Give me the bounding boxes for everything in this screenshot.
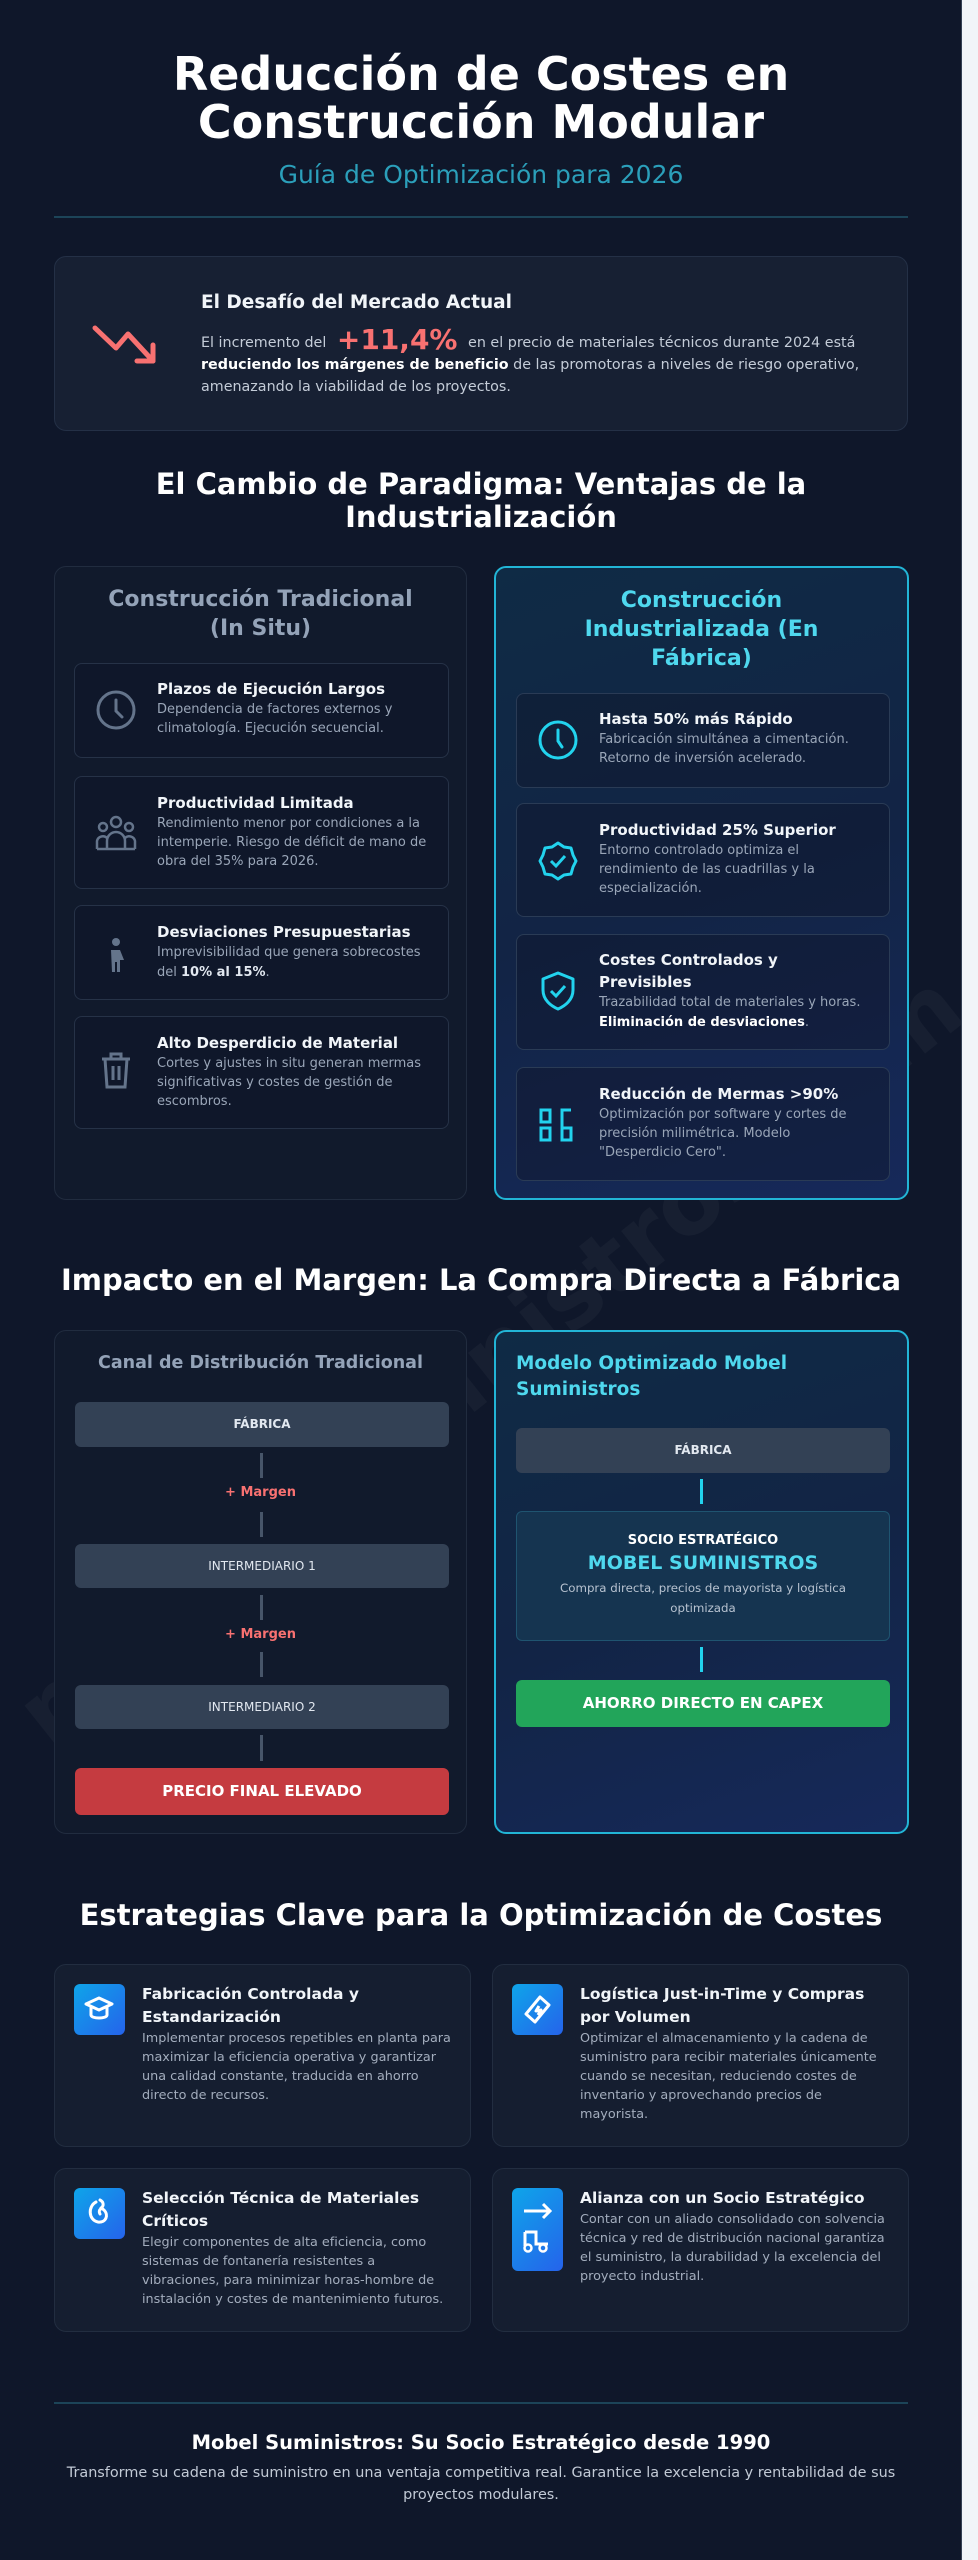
flow: precio final: PRECIO FINAL ELEVADO xyxy=(162,1782,362,1800)
panel title: (In Situ) xyxy=(210,616,311,641)
flow: socio estrategico: SOCIO ESTRATÉGICO xyxy=(628,1533,778,1548)
panel title: Construcción xyxy=(621,588,782,613)
icon: arrow truck xyxy=(512,2188,563,2271)
footer title: Mobel Suministros: Su Socio Estratégico desde 1990 xyxy=(192,2431,770,2454)
item: productividad superior: Entorno controlado optimiza el rendimiento de las cuadrillas y la especialización. xyxy=(599,843,815,896)
panel title: Fábrica) xyxy=(651,646,752,671)
item: productividad: Productividad Limitada xyxy=(157,794,354,812)
item: desperdicio xyxy=(74,1016,449,1129)
item: costes controlados xyxy=(516,934,890,1050)
card: logistica: Logística Just-in-Time y Compras por Volumen xyxy=(580,1985,864,2026)
flow: socio estrategico: MOBEL SUMINISTROS xyxy=(588,1552,818,1574)
card: alianza: Alianza con un Socio Estratégico xyxy=(580,2189,865,2207)
item: desviaciones xyxy=(74,905,449,1000)
icon: leaf xyxy=(74,2188,125,2239)
item: mermas: Optimización por software y cortes de precisión milimétrica. Modelo "Desperdicio Cero". xyxy=(599,1107,847,1160)
heading: impact: Impacto en el Margen: La Compra Directa a Fábrica xyxy=(61,1263,901,1297)
item: costes controlados: Costes Controlados y Previsibles xyxy=(599,951,778,991)
card: alianza: Contar con un aliado consolidado con solvencia técnica y red de distribución nacional garantiza el suministro, la durabilidad y la excelencia del proyecto industrial. xyxy=(580,2212,885,2284)
flow: intermediario 1: INTERMEDIARIO 1 xyxy=(208,1559,316,1573)
card: logistica: Optimizar el almacenamiento y la cadena de suministro para recibir materiales únicamente cuando se necesitan, reduciendo costes de inventario y aprovechando precios de mayorista. xyxy=(580,2031,877,2122)
card: materiales: Selección Técnica de Materiales Críticos xyxy=(142,2189,419,2230)
flow: intermediario 2: INTERMEDIARIO 2 xyxy=(208,1700,316,1714)
item: rapido: Fabricación simultánea a cimentación. Retorno de inversión acelerado. xyxy=(599,732,849,766)
title: Reducción de Costes en xyxy=(173,47,789,101)
title: Construcción Modular xyxy=(198,95,764,149)
panel title: Construcción Tradicional xyxy=(108,587,413,612)
item: rapido: Hasta 50% más Rápido xyxy=(599,710,793,728)
card: logistica xyxy=(492,1964,909,2147)
channel title: Canal de Distribución Tradicional xyxy=(98,1353,423,1373)
heading: paradigm: El Cambio de Paradigma: Ventajas de la xyxy=(156,467,806,501)
item: costes controlados: Trazabilidad total de materiales y horas. Eliminación de desviaciones. xyxy=(599,995,860,1030)
flow: ahorro: AHORRO DIRECTO EN CAPEX xyxy=(583,1694,823,1712)
flow: fabrica: FÁBRICA xyxy=(233,1417,291,1431)
panel: challenge xyxy=(54,256,908,431)
heading: strategies: Estrategias Clave para la Optimización de Costes xyxy=(80,1898,882,1932)
item: desperdicio: Alto Desperdicio de Material xyxy=(157,1034,398,1052)
label: margen 1: + Margen xyxy=(225,1485,296,1500)
heading: paradigm: Industrialización xyxy=(345,500,617,534)
item: plazos: Plazos de Ejecución Largos xyxy=(157,680,385,698)
card: materiales: Elegir componentes de alta eficiencia, como sistemas de fontanería resistentes a vibraciones, para minimizar horas-hombre de instalación y costes de mantenimiento futuros. xyxy=(142,2235,443,2307)
icon: trending down xyxy=(92,326,156,364)
card: fabricacion: Fabricación Controlada y Estandarización xyxy=(142,1985,359,2026)
flow: fabrica: FÁBRICA xyxy=(674,1443,732,1457)
item: desviaciones: Desviaciones Presupuestarias xyxy=(157,923,411,941)
flow: intermediario 1 xyxy=(75,1544,449,1588)
flow: socio estrategico: Compra directa, precios de mayorista y logística optimizada xyxy=(560,1581,846,1615)
panel title xyxy=(585,588,818,671)
panel: traditional channel xyxy=(54,1330,467,1834)
panel: optimized model xyxy=(494,1330,909,1834)
panel title: Industrializada (En xyxy=(585,617,818,642)
flow: precio final xyxy=(75,1768,449,1815)
item: productividad: Rendimiento menor por condiciones a la intemperie. Riesgo de déficit de mano de obra del 35% para 2026. xyxy=(157,816,426,869)
card: alianza xyxy=(492,2168,909,2332)
card: fabricacion: Implementar procesos repetibles en planta para maximizar la eficiencia operativa y garantizar una calidad constante, traducida en ahorro directo de recursos. xyxy=(142,2031,451,2103)
flow: ahorro xyxy=(516,1680,890,1727)
item: productividad superior: Productividad 25% Superior xyxy=(599,821,836,839)
panel: traditional xyxy=(54,566,467,1200)
item: productividad xyxy=(74,776,449,889)
item: rapido xyxy=(516,693,890,788)
title xyxy=(173,47,789,149)
watermark: mobelsuministros.com xyxy=(0,952,962,1767)
card: materiales xyxy=(54,2168,471,2332)
model title: Modelo Optimizado Mobel Suministros xyxy=(516,1353,787,1400)
flow: fabrica xyxy=(75,1402,449,1447)
card: fabricacion xyxy=(54,1964,471,2147)
subtitle: Guía de Optimización para 2026 xyxy=(279,160,683,189)
item: plazos xyxy=(74,663,449,758)
flow: intermediario 2 xyxy=(75,1685,449,1729)
heading: paradigm xyxy=(156,467,806,534)
item: productividad superior xyxy=(516,803,890,917)
item: mermas: Reducción de Mermas >90% xyxy=(599,1085,838,1103)
panel title xyxy=(108,587,413,641)
item: mermas xyxy=(516,1067,890,1181)
flow: fabrica xyxy=(516,1428,890,1473)
challenge heading: El Desafío del Mercado Actual xyxy=(201,292,512,313)
icon: cap xyxy=(74,1984,125,2035)
item: desperdicio: Cortes y ajustes in situ generan mermas significativas y costes de gestión de escombros. xyxy=(157,1056,421,1109)
flow: socio estrategico xyxy=(516,1511,890,1641)
item: desviaciones: Imprevisibilidad que genera sobrecostes del 10% al 15%. xyxy=(157,945,421,980)
footer text: Transforme su cadena de suministro en una ventaja competitiva real. Garantice la excelencia y rentabilidad de sus proyectos modulares. xyxy=(67,2465,895,2503)
label: margen 2: + Margen xyxy=(225,1627,296,1642)
challenge text: El incremento del +11,4% en el precio de materiales técnicos durante 2024 está reduciendo los márgenes de beneficio de las promotoras a niveles de riesgo operativo, amenazando la viabilidad de los proyectos. xyxy=(201,323,859,395)
item: plazos: Dependencia de factores externos y climatología. Ejecución secuencial. xyxy=(157,702,392,736)
panel: industrialized xyxy=(494,566,909,1200)
icon: ticket xyxy=(512,1984,563,2035)
